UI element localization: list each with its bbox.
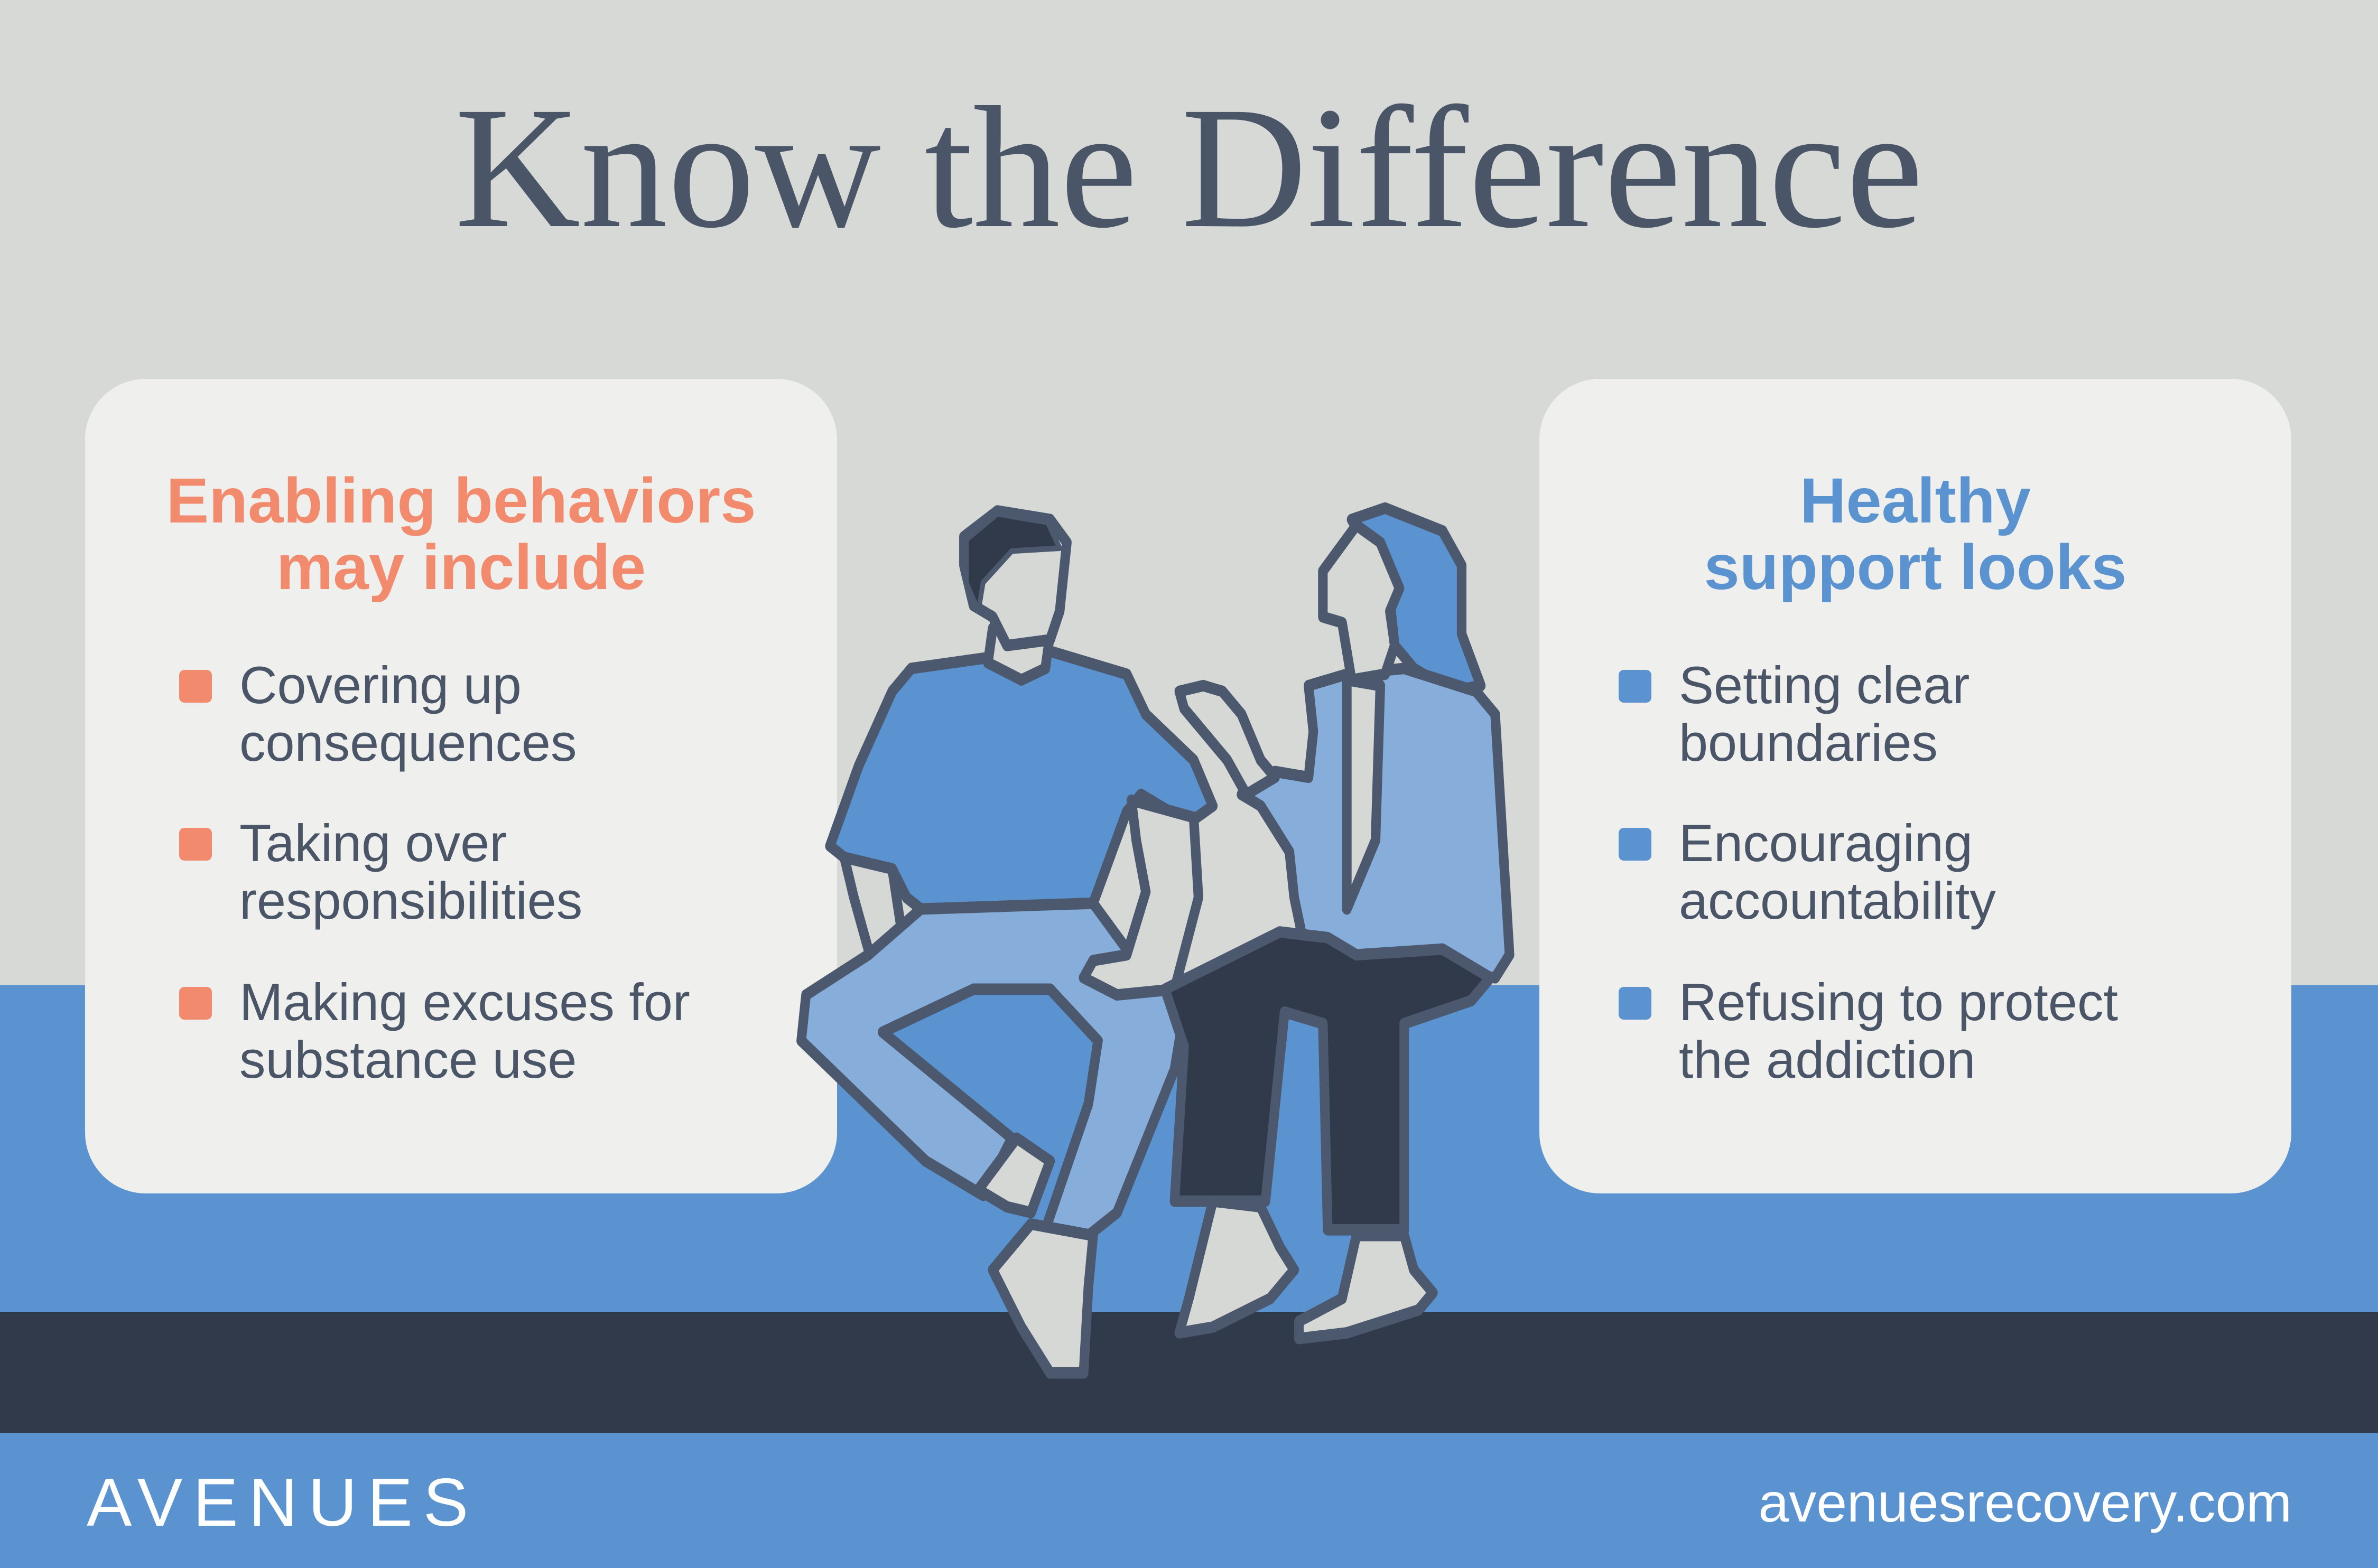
heading enabling: may include bbox=[276, 531, 646, 603]
heading enabling bbox=[166, 464, 756, 603]
bullet 2: Taking over bbox=[239, 814, 507, 872]
bullet 1: boundaries bbox=[1679, 713, 1938, 772]
woman: face bbox=[1323, 525, 1399, 680]
panel: enabling bbox=[85, 379, 837, 1193]
man: shirt bbox=[830, 651, 1213, 909]
blue floor band bbox=[0, 985, 2378, 1313]
bullet 1: consequences bbox=[239, 713, 577, 772]
heading enabling: Enabling behaviors bbox=[166, 464, 756, 536]
title: Know the Difference bbox=[454, 71, 1924, 264]
illustration: two people sitting bbox=[796, 502, 1515, 1379]
bullet 2: accountability bbox=[1679, 871, 1996, 930]
bullet 3: the addiction bbox=[1679, 1030, 1975, 1089]
woman: shoes bbox=[1179, 1201, 1433, 1339]
bullet 1: Covering up bbox=[239, 656, 522, 714]
man: pants bbox=[801, 903, 1184, 1236]
man: left forearm bbox=[844, 857, 916, 978]
bullet 2 bbox=[179, 814, 582, 930]
bullet 1: Setting clear bbox=[1679, 656, 1970, 714]
bullet 2: responsibilities bbox=[239, 871, 582, 930]
heading healthy: support looks bbox=[1704, 531, 2126, 603]
bullet 2 bbox=[1619, 814, 1996, 930]
bullet 3: Making excuses for bbox=[239, 973, 690, 1031]
footer band bbox=[0, 1433, 2378, 1568]
woman: jacket bbox=[1241, 668, 1510, 978]
man: neck and head bbox=[964, 511, 1067, 680]
bullet 3: substance use bbox=[239, 1030, 577, 1089]
man: right arm bbox=[1084, 800, 1199, 995]
bullet 3 bbox=[179, 973, 690, 1089]
bullet 1 bbox=[1619, 656, 1970, 772]
website url: avenuesrecovery.com bbox=[1758, 1472, 2292, 1534]
bullet 3: Refusing to protect bbox=[1679, 973, 2118, 1031]
woman: raised hand bbox=[1179, 686, 1275, 795]
panel: healthy bbox=[1539, 379, 2291, 1193]
man: shoes bbox=[978, 1138, 1093, 1373]
heading healthy: Healthy bbox=[1800, 464, 2031, 536]
bullet 2: Encouraging bbox=[1679, 814, 1973, 872]
heading healthy bbox=[1704, 464, 2126, 603]
dark bench band bbox=[0, 1312, 2378, 1433]
woman: hair bbox=[1352, 508, 1481, 692]
bullet 3 bbox=[1619, 973, 2118, 1089]
woman: pants bbox=[1165, 932, 1490, 1230]
bullet 1 bbox=[179, 656, 577, 772]
logo: AVENUES: AVENUES bbox=[87, 1465, 479, 1541]
